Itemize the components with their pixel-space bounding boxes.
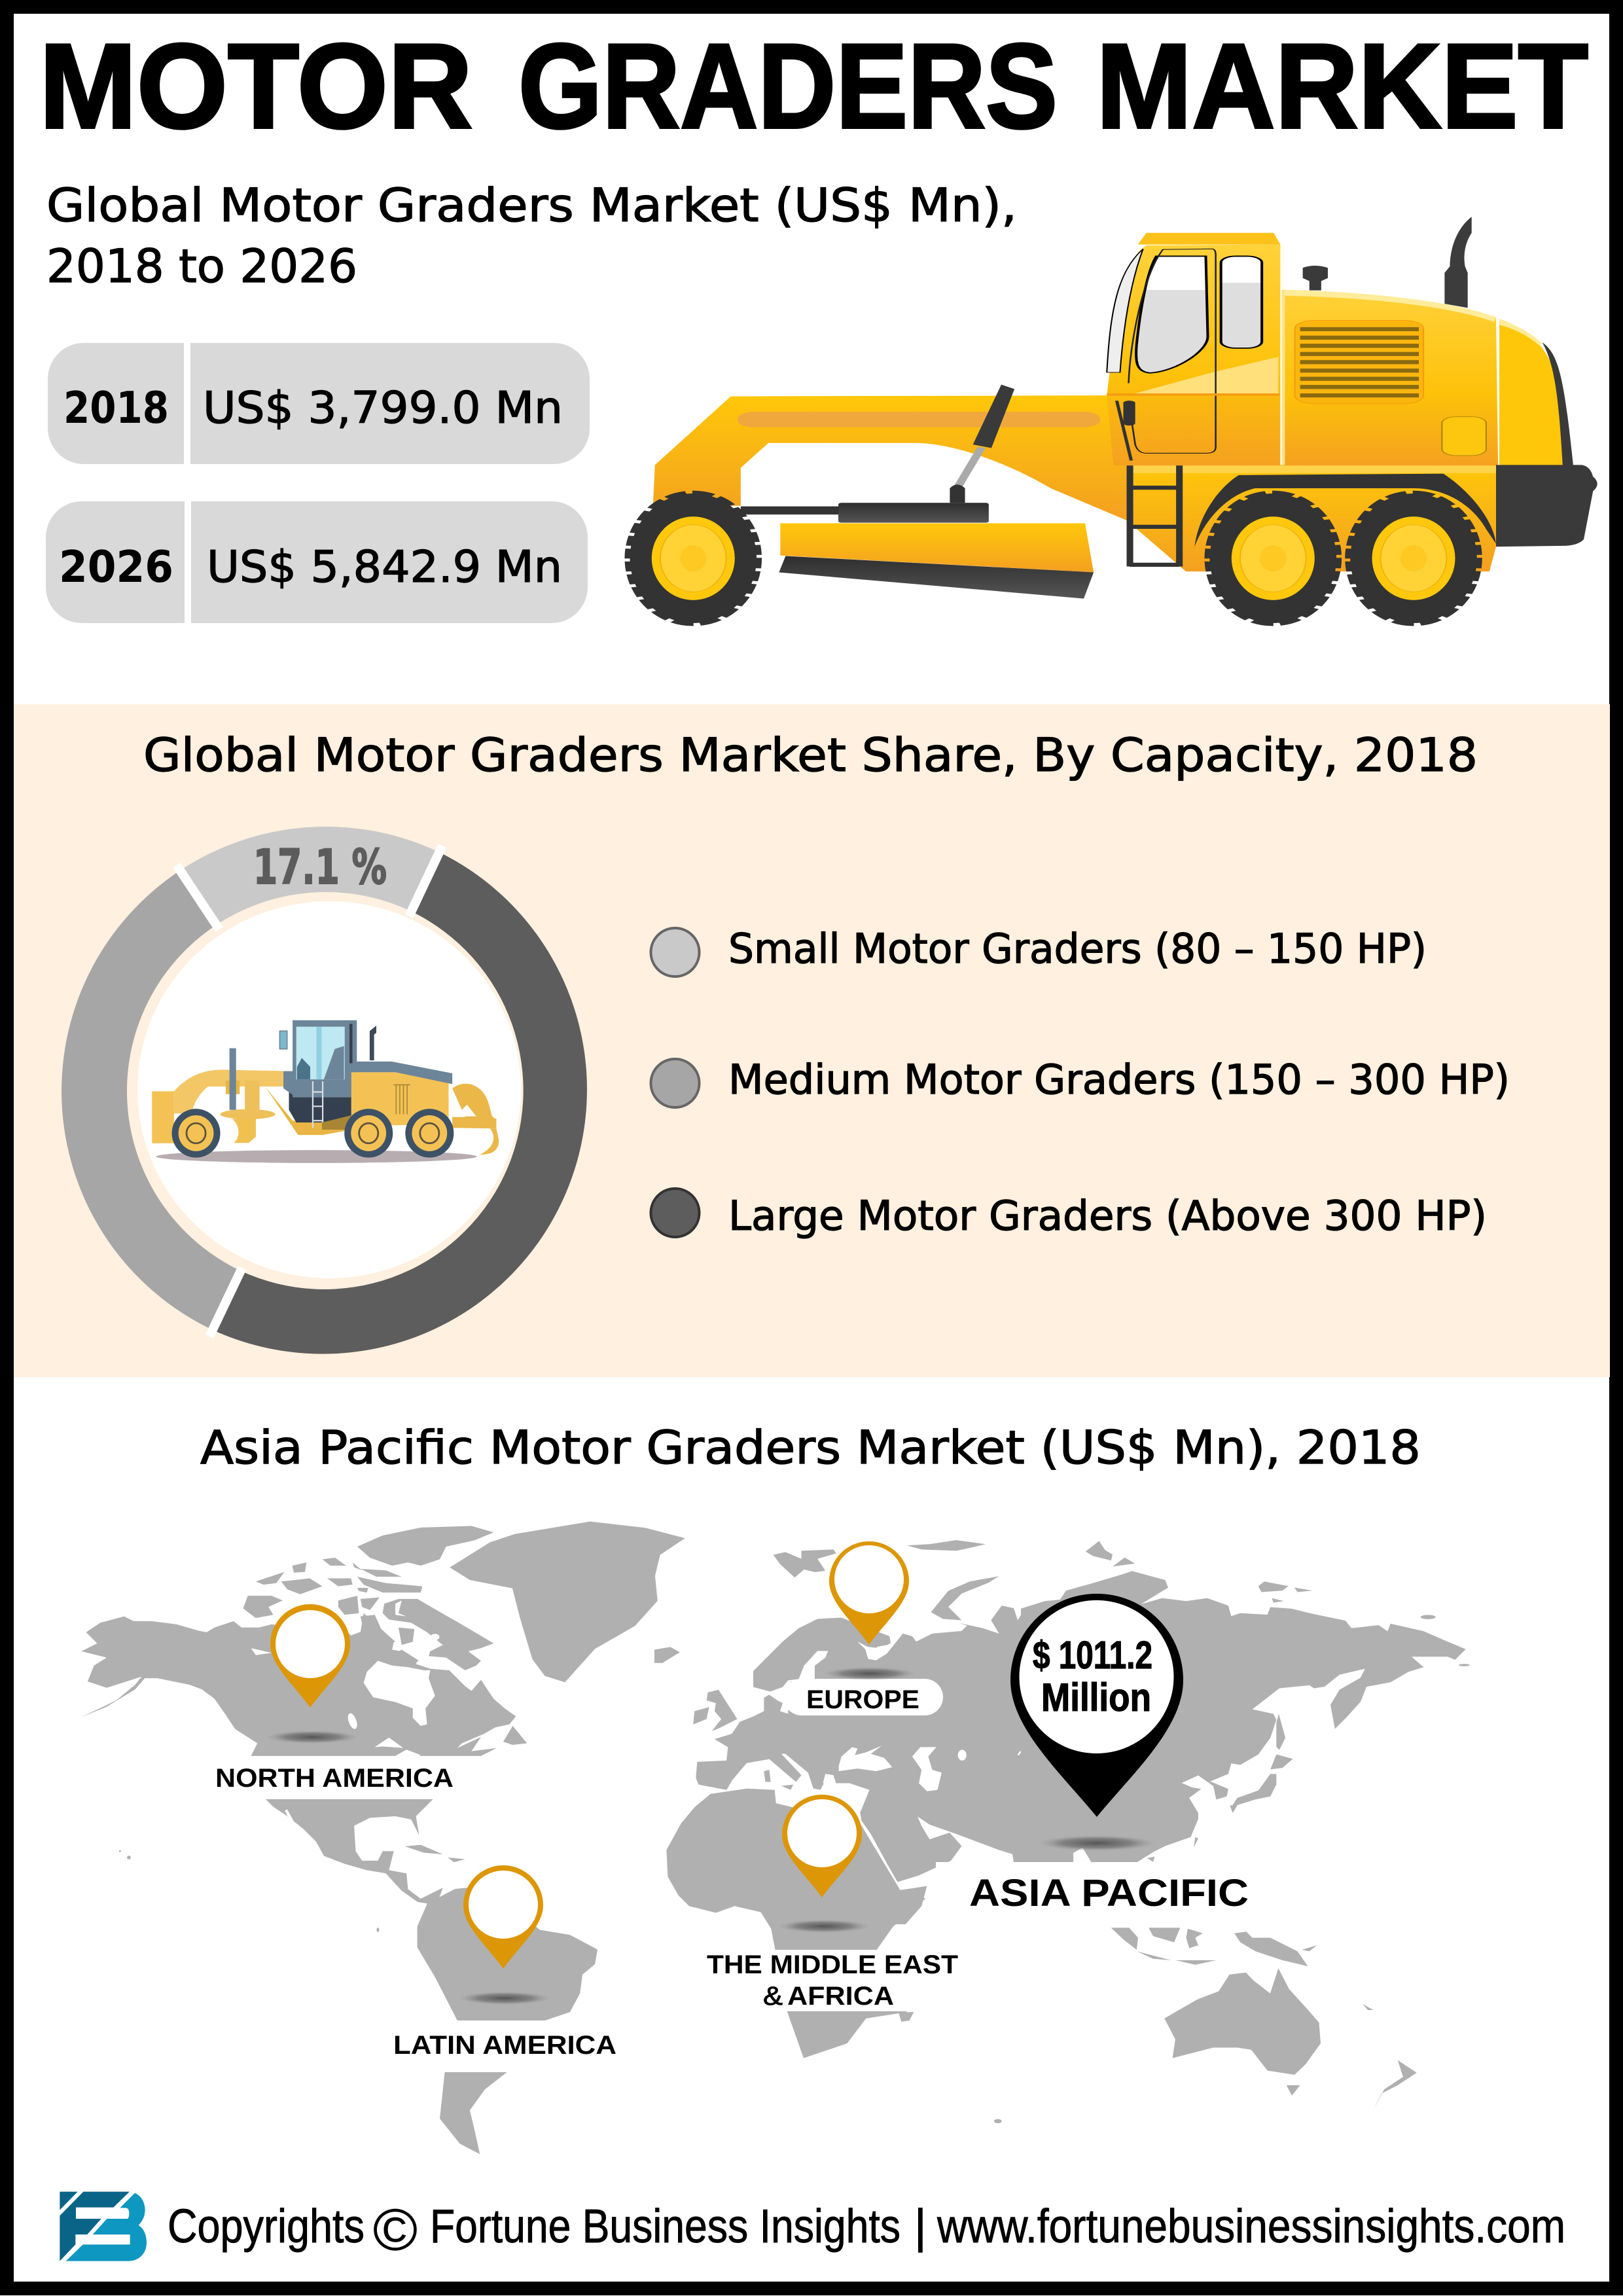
title: GRADERS	[518, 18, 1058, 153]
icon: small motor grader	[152, 1020, 499, 1163]
panel: market share by capacity	[14, 704, 1610, 1377]
stat row: 2026: 2026	[59, 541, 173, 592]
heading: market share: Global Motor Graders Market Share, By Capacity, 2018	[143, 728, 1478, 782]
stat row: 2018: US$ 3,799.0 Mn	[203, 382, 563, 433]
subheading: global market	[46, 179, 1017, 293]
label: middle east and africa	[707, 1950, 958, 2011]
stat row: 2026: US$ 5,842.9 Mn	[207, 541, 562, 592]
label pill: europe	[783, 1679, 943, 1715]
title	[39, 18, 1588, 153]
heading: asia pacific: Asia Pacific Motor Graders Market (US$ Mn), 2018	[200, 1421, 1421, 1475]
label: middle east and africa: AFRICA	[787, 1982, 894, 2011]
pin: asia pacific: $ 1011.2	[1033, 1634, 1152, 1677]
label: middle east and africa: &	[763, 1982, 783, 2011]
label band: middle east and africa	[694, 1950, 969, 2011]
label pill: europe: EUROPE	[806, 1685, 919, 1714]
pin: middle east and africa	[778, 1795, 870, 1933]
label: asia pacific: ASIA PACIFIC	[969, 1872, 1249, 1914]
icon: yellow motor grader	[628, 217, 1597, 624]
footer copyright text: ©	[373, 2198, 418, 2263]
footer copyright text: |	[914, 2200, 927, 2253]
world map	[81, 1522, 1470, 2154]
subheading: global market: 2018 to 2026	[46, 240, 357, 293]
pin: north america	[266, 1604, 358, 1744]
pin: latin america	[459, 1865, 550, 2005]
legend item: small: Small Motor Graders (80 – 150 HP)	[728, 925, 1427, 973]
footer copyright text: Copyrights	[168, 2200, 365, 2253]
pin: europe	[824, 1541, 916, 1680]
title: MOTOR	[39, 18, 473, 153]
legend item: medium: Medium Motor Graders (150 – 300 HP)	[728, 1056, 1510, 1103]
label band: north america	[196, 1756, 497, 1799]
legend item: large: Large Motor Graders (Above 300 HP)	[728, 1192, 1487, 1240]
subheading: global market: Global Motor Graders Market (US$ Mn),	[46, 179, 1017, 232]
stat row: 2018	[48, 343, 590, 464]
label: middle east and africa: THE MIDDLE EAST	[707, 1950, 958, 1979]
stat row: 2026	[46, 501, 588, 623]
title: MARKET	[1096, 18, 1588, 153]
label band: latin america	[386, 2020, 628, 2072]
label band: asia pacific	[936, 1862, 1276, 1928]
label: north america: NORTH AMERICA	[215, 1764, 454, 1793]
footer copyright text: Fortune Business Insights	[430, 2200, 901, 2253]
pin: asia pacific: Million	[1041, 1676, 1151, 1719]
legend	[651, 925, 1510, 1240]
icon: company logo	[60, 2192, 147, 2261]
stat row: 2018: 2018	[63, 382, 169, 433]
donut value: 17.1 %	[253, 840, 387, 895]
label: latin america: LATIN AMERICA	[393, 2031, 616, 2060]
pin: asia pacific	[1010, 1594, 1183, 1851]
donut chart	[62, 827, 587, 1354]
footer copyright text	[168, 2198, 1565, 2263]
